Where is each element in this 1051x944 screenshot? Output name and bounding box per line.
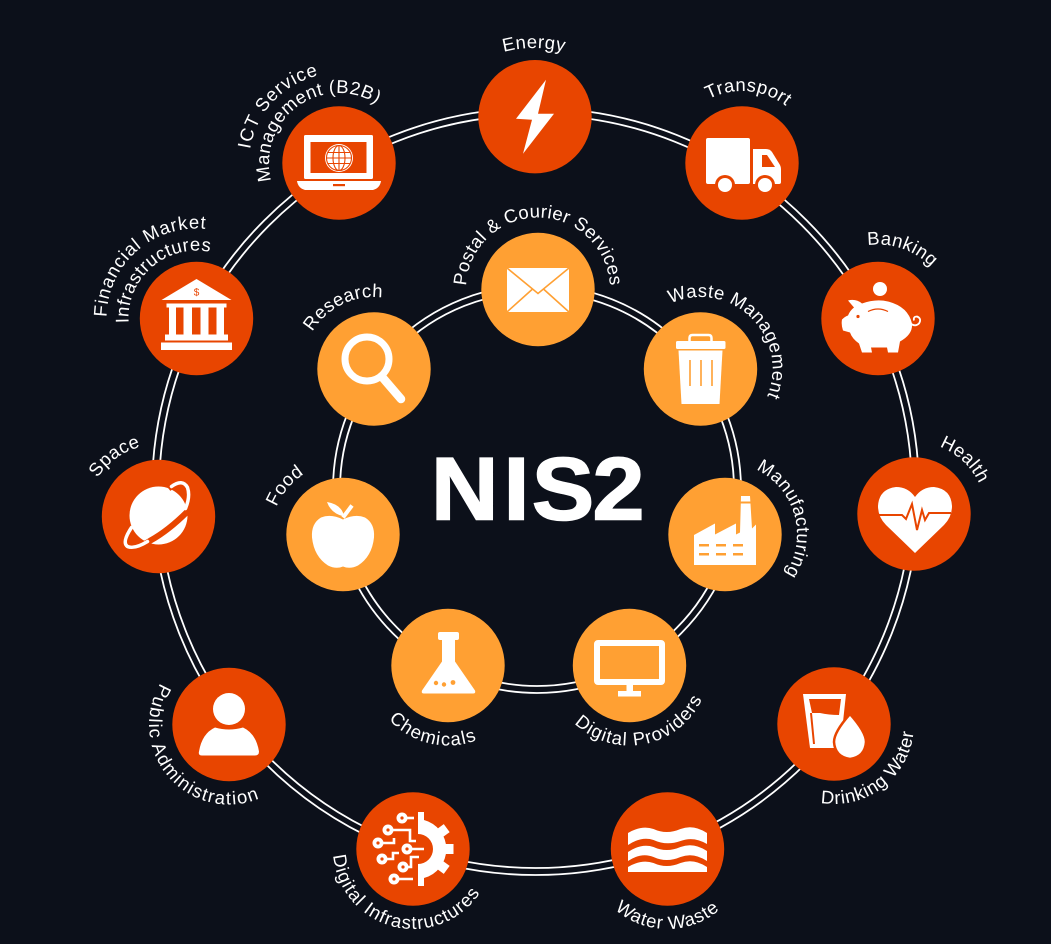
node: Energy [478,60,592,173]
label: Financial Market Infrastructures: Financial Market [94,216,206,316]
label: Chemicals: Chemicals [392,713,476,746]
label: Research: Research [302,284,382,330]
node: Postal & Courier Services [481,233,595,346]
node: Waste Management [644,312,757,426]
label: ICT Service Management (B2B): ICT Service [238,67,316,148]
label: Financial Market Infrastructures: Infrastructures [116,240,210,322]
label: Public Administration: Public Administration [149,684,258,805]
label: ICT Service Management (B2B): Management (B2B) [256,80,380,182]
node: Banking [821,262,935,375]
node: Space [102,460,215,573]
node: Manufacturing [668,478,782,591]
label: Space: Space [89,438,138,476]
label: Health: Health [940,436,988,482]
node: Digital Infrastructures [356,792,470,906]
node: Drinking Water [777,667,891,781]
inner ring [333,285,741,693]
label: Waste Management: Waste Management [666,286,782,400]
node: Chemicals [391,609,505,722]
label: Postal & Courier Services: Postal & Courier Services [454,205,620,285]
node: ICT Service Management [282,106,396,220]
node: Research [317,312,431,426]
label: Digital Providers: Digital Providers [575,696,701,746]
node: Health [857,457,971,571]
node: Digital Providers [573,609,686,722]
node: Financial Market Infrastructures [140,262,253,375]
node: Financial Market Infrastructures: $ [194,288,200,298]
node: Food [286,478,400,591]
label: Energy: Energy [502,37,566,54]
outer ring [152,108,919,875]
label: Food: Food [266,464,303,506]
label: Manufacturing: Manufacturing [758,459,809,578]
label: Transport: Transport [704,81,792,106]
node: Water Waste [611,792,724,906]
node: Public Administration [172,668,286,781]
label: Banking: Banking [868,232,937,268]
label: Drinking Water: Drinking Water [822,731,914,804]
label: Digital Infrastructures: Digital Infrastructures [333,854,478,930]
title: NIS2 [431,440,644,539]
label: Water Waste: Water Waste [618,899,718,929]
node: Transport [685,106,799,220]
